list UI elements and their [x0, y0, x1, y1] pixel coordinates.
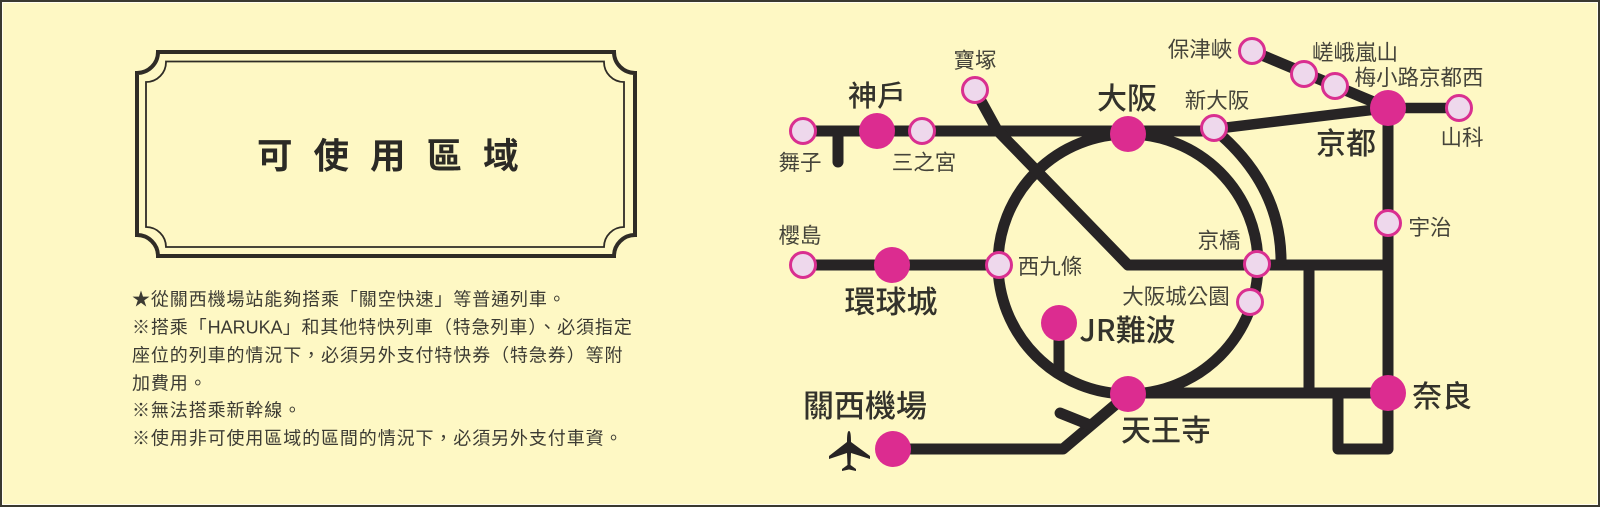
major station labels: 神戶	[848, 80, 906, 113]
chart: railway route map	[778, 38, 1484, 471]
text block: usage notes: 座位的列車的情況下，必須另外支付特快券（特急券）等附	[132, 346, 623, 366]
major station labels: 天王寺	[1121, 415, 1211, 448]
text block: usage notes: ※無法搭乘新幹線。	[132, 400, 302, 420]
minor station labels: 舞子	[778, 151, 822, 175]
minor station labels: 京橋	[1197, 229, 1241, 253]
minor station labels: 宇治	[1408, 216, 1452, 240]
title: 可使用區域	[257, 136, 540, 176]
major station labels: JR難波	[1079, 306, 1176, 350]
text block: usage notes: ※使用非可使用區域的區間的情況下，必須另外支付車資。	[132, 428, 623, 448]
panel: title plaque	[137, 52, 635, 256]
minor stations	[790, 38, 1472, 314]
text block: usage notes: ★從關西機場站能夠搭乘「關空快速」等普通列車。	[132, 290, 567, 310]
minor station labels: 大阪城公園	[1122, 285, 1230, 309]
major station labels: 京都	[1316, 128, 1376, 161]
text block: usage notes: 加費用。	[132, 374, 208, 394]
minor station labels: 梅小路京都西	[1354, 66, 1484, 90]
major stations	[859, 90, 1406, 467]
minor station labels: 保津峽	[1168, 38, 1232, 62]
text block: usage notes	[132, 290, 633, 448]
major station labels	[803, 80, 1472, 448]
major station labels: 大阪	[1097, 83, 1157, 116]
major station labels: 環球城	[844, 285, 938, 320]
minor station labels: 櫻島	[778, 224, 822, 248]
icon: airplane	[829, 431, 870, 471]
minor station labels: 西九條	[1018, 255, 1082, 279]
minor station labels: 三之宮	[892, 151, 956, 175]
text block: usage notes: ※搭乘「HARUKA」和其他特快列車（特急列車）、必須指定	[132, 318, 633, 338]
minor station labels	[778, 38, 1484, 309]
major station labels: 關西機場	[803, 389, 927, 424]
minor station labels: 嵯峨嵐山	[1312, 41, 1398, 65]
track lines	[803, 51, 1459, 449]
minor station labels: 寶塚	[953, 49, 997, 73]
major station labels: 奈良	[1412, 381, 1472, 414]
minor station labels: 山科	[1440, 126, 1484, 150]
minor station labels: 新大阪	[1185, 89, 1249, 113]
